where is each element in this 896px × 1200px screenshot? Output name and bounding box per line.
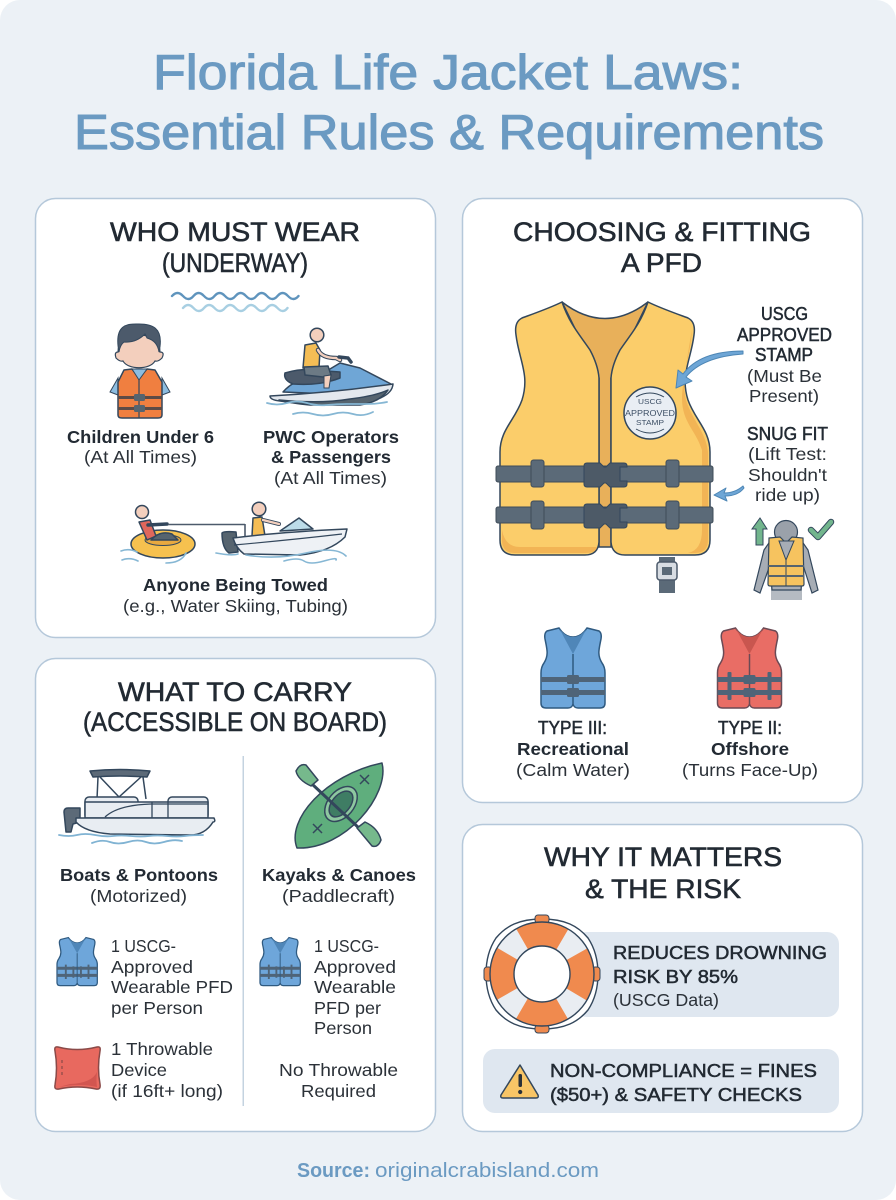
heading: choosing and fitting xyxy=(513,217,811,278)
text: no throwable required xyxy=(279,1060,398,1101)
text: throwable device: Device xyxy=(111,1060,167,1080)
heading: choosing and fitting: CHOOSING & FITTING xyxy=(513,217,811,247)
label: kayaks and canoes: Kayaks & Canoes xyxy=(262,865,416,885)
callout: reduces drowning risk: (USCG Data) xyxy=(613,990,719,1010)
straps and buckles xyxy=(496,460,713,529)
side strap xyxy=(657,557,677,593)
label: type ii: Offshore xyxy=(711,739,789,759)
heading: why it matters: & THE RISK xyxy=(585,874,741,904)
source line: originalcrabisland.com xyxy=(375,1160,599,1182)
callout: non-compliance fines xyxy=(483,1049,839,1113)
arrow: to snug fit xyxy=(714,486,744,501)
title: Essential Rules & Requirements xyxy=(74,106,824,160)
label: pwc operators: & Passengers xyxy=(271,447,391,467)
text: left wearable requirement: Wearable PFD xyxy=(111,977,233,997)
heading: who must wear xyxy=(110,217,360,278)
label: boats and pontoons: Boats & Pontoons xyxy=(60,865,218,885)
heading: what to carry: (ACCESSIBLE ON BOARD) xyxy=(83,707,387,737)
callout: non-compliance fines: NON-COMPLIANCE = FINES xyxy=(550,1061,817,1081)
text: left wearable requirement xyxy=(111,936,233,1018)
text: right wearable requirement xyxy=(314,936,396,1038)
text: throwable device xyxy=(111,1039,223,1101)
text: throwable device: (if 16ft+ long) xyxy=(111,1081,223,1101)
label: snug fit: (Lift Test: xyxy=(748,444,827,464)
approved stamp xyxy=(624,387,676,439)
source line xyxy=(297,1160,599,1182)
icon: warning triangle xyxy=(501,1065,538,1098)
panel: what to carry xyxy=(36,658,436,1132)
icon: life ring xyxy=(484,915,600,1033)
label: children under 6 xyxy=(67,427,214,467)
label: kayaks and canoes xyxy=(262,865,416,906)
callout: non-compliance fines: ($50+) & SAFETY CHECKS xyxy=(550,1085,802,1105)
label: uscg approved stamp xyxy=(737,304,832,406)
label: anyone being towed: (e.g., Water Skiing, Tubing) xyxy=(123,596,348,616)
approved stamp: APPROVED xyxy=(625,408,675,418)
icon: lift test figure xyxy=(752,518,831,600)
icon: blue vest left xyxy=(57,938,97,986)
icon: large yellow life jacket xyxy=(496,302,713,593)
text: no throwable required: Required xyxy=(301,1081,376,1101)
text: left wearable requirement: 1 USCG- xyxy=(111,936,176,956)
label: uscg approved stamp: STAMP xyxy=(755,345,813,365)
icon: jet ski rider xyxy=(267,328,393,416)
heading: who must wear: WHO MUST WEAR xyxy=(110,217,360,247)
text: right wearable requirement: PFD per xyxy=(314,998,381,1018)
approved stamp: STAMP xyxy=(636,418,664,427)
label: uscg approved stamp: (Must Be xyxy=(747,366,822,386)
icon: blue vest right xyxy=(260,938,300,986)
label: pwc operators xyxy=(263,427,399,488)
heading: why it matters xyxy=(544,842,782,904)
text: left wearable requirement: Approved xyxy=(111,957,193,977)
label: type iii xyxy=(516,718,630,780)
heading: what to carry: WHAT TO CARRY xyxy=(118,677,352,707)
text: throwable device: 1 Throwable xyxy=(111,1039,213,1059)
icon: child in life jacket xyxy=(110,324,170,418)
icon: type ii red vest xyxy=(718,628,782,708)
source line: Source: xyxy=(297,1160,370,1182)
callout: reduces drowning risk: REDUCES DROWNING xyxy=(613,943,827,963)
label: children under 6: Children Under 6 xyxy=(67,427,214,447)
label: type iii: (Calm Water) xyxy=(516,760,630,780)
icon: pontoon boat xyxy=(59,770,215,844)
icon: throwable cushion xyxy=(55,1047,100,1089)
heading: choosing and fitting: A PFD xyxy=(621,248,702,278)
label: kayaks and canoes: (Paddlecraft) xyxy=(282,886,395,906)
label: type ii xyxy=(682,718,818,780)
heading: what to carry xyxy=(83,677,387,737)
text: right wearable requirement: Person xyxy=(314,1018,372,1038)
label: uscg approved stamp: USCG xyxy=(761,304,808,324)
label: type ii: TYPE II: xyxy=(718,718,782,738)
callout: reduces drowning risk xyxy=(575,932,839,1017)
heading: who must wear: (UNDERWAY) xyxy=(162,248,308,278)
panel: who must wear xyxy=(36,198,436,638)
icon: person towed on tube behind boat xyxy=(121,502,347,563)
label: snug fit: ride up) xyxy=(755,485,820,505)
label: pwc operators: (At All Times) xyxy=(274,468,387,488)
text: left wearable requirement: per Person xyxy=(111,998,203,1018)
label: boats and pontoons: (Motorized) xyxy=(90,886,187,906)
title xyxy=(74,46,824,160)
heading: why it matters: WHY IT MATTERS xyxy=(544,842,782,872)
label: uscg approved stamp: APPROVED xyxy=(737,325,832,345)
text: right wearable requirement: 1 USCG- xyxy=(314,936,379,956)
label: type iii: TYPE III: xyxy=(538,718,607,738)
label: snug fit xyxy=(747,424,828,505)
panel: why it matters xyxy=(462,824,862,1132)
arrow: to stamp xyxy=(676,351,743,388)
icon: type iii blue vest xyxy=(541,628,605,708)
text: no throwable required: No Throwable xyxy=(279,1060,398,1080)
icon: waves xyxy=(172,293,298,311)
label: anyone being towed xyxy=(123,575,348,616)
label: pwc operators: PWC Operators xyxy=(263,427,399,447)
label: snug fit: Shouldn't xyxy=(748,465,827,485)
panel: choosing and fitting a pfd xyxy=(462,198,862,802)
approved stamp: USCG xyxy=(638,397,662,406)
label: boats and pontoons xyxy=(60,865,218,906)
text: right wearable requirement: Approved xyxy=(314,957,396,977)
label: children under 6: (At All Times) xyxy=(84,447,197,467)
callout: reduces drowning risk: RISK BY 85% xyxy=(613,967,738,987)
title: Florida Life Jacket Laws: xyxy=(153,46,743,100)
label: type iii: Recreational xyxy=(517,739,629,759)
label: snug fit: SNUG FIT xyxy=(747,424,828,444)
label: anyone being towed: Anyone Being Towed xyxy=(143,575,328,595)
text: right wearable requirement: Wearable xyxy=(314,977,396,997)
icon: kayak and paddle xyxy=(295,763,383,848)
label: uscg approved stamp: Present) xyxy=(749,386,819,406)
label: type ii: (Turns Face-Up) xyxy=(682,760,818,780)
